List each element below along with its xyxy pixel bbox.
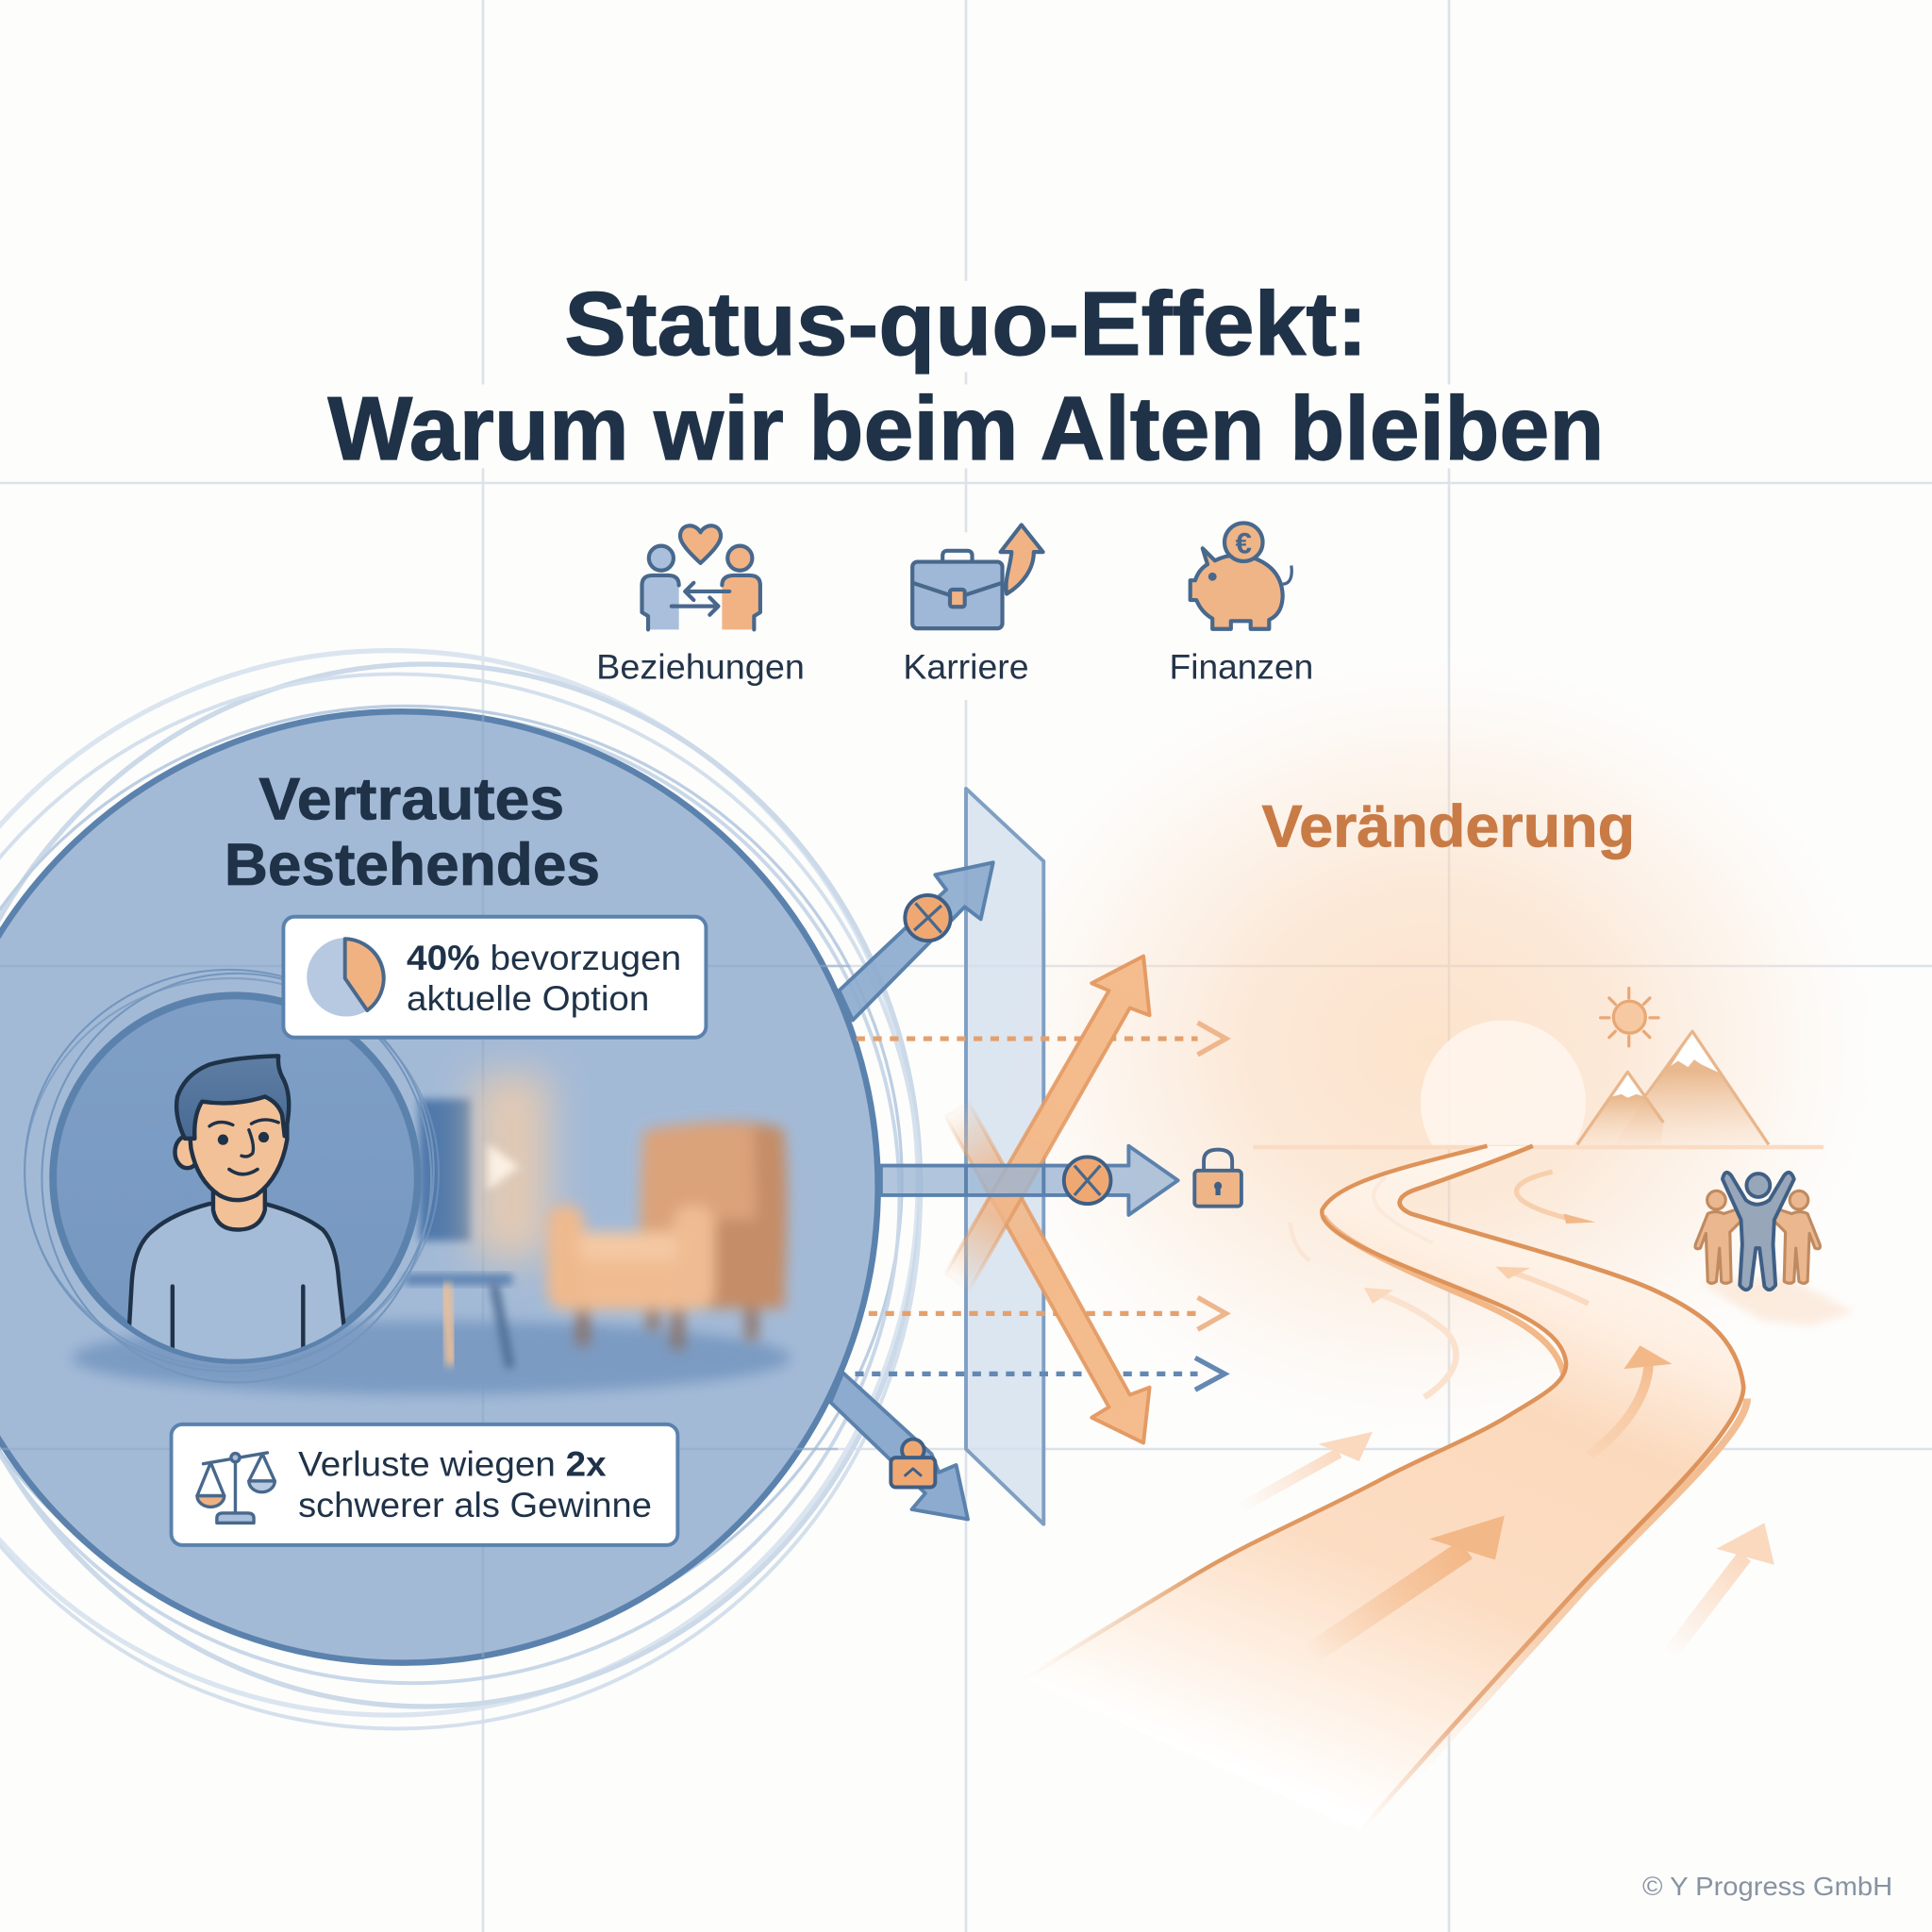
arrow: left of road: [1237, 1432, 1373, 1513]
heading: Vertrautes Bestehendes: [225, 767, 600, 898]
person: left: [1695, 1191, 1742, 1283]
icon: blocked person badge: [891, 1440, 935, 1487]
icon: group of people: [1695, 1173, 1855, 1325]
arrow: road big: [1303, 1516, 1505, 1665]
change glow background: [961, 641, 1897, 1454]
title: [327, 275, 1605, 479]
callout: 40 percent: aktuelle Option: [407, 978, 649, 1018]
road edge shadow: right: [1380, 1398, 1747, 1816]
callout text: Verluste wiegen 2x: [298, 1444, 607, 1484]
person circle: [25, 970, 439, 1382]
icon: relationships: [641, 525, 760, 629]
blocked arrow: upper: [839, 862, 993, 1020]
pie chart: [307, 938, 386, 1017]
road edge: right: [1360, 1146, 1743, 1831]
orange arrow: upward: [945, 957, 1150, 1291]
icon: lock: [1194, 1150, 1241, 1207]
soft motion arrows: [1237, 1172, 1774, 1665]
person: centre: [1723, 1173, 1794, 1290]
heading: Veränderung: Veränderung: [1261, 793, 1635, 859]
horizon line: [1253, 1145, 1824, 1149]
arrow: right of road: [1662, 1523, 1774, 1661]
blurred living room: [72, 1074, 791, 1395]
callout: losses weigh double: [172, 1424, 677, 1545]
barrier panel: [966, 789, 1043, 1524]
road edge: left: [1025, 1146, 1566, 1679]
road edge shadow: left: [1324, 1216, 1563, 1374]
label: Beziehungen: Beziehungen: [596, 647, 805, 687]
person illustration: [127, 1056, 349, 1368]
icon: balance scale: [197, 1453, 275, 1523]
callout text: 40% bevorzugen: [407, 938, 681, 977]
horizon landscape: [1253, 989, 1824, 1147]
winding road: [1025, 1146, 1747, 1831]
pale sun disc: [1421, 1020, 1586, 1147]
arrow: road curved: [1590, 1345, 1672, 1456]
callout: 40 percent: [283, 917, 706, 1038]
title: Warum wir beim Alten bleiben: [327, 379, 1605, 479]
icon: mountains: [1577, 1031, 1769, 1144]
person: right: [1774, 1191, 1820, 1283]
label: Karriere: Karriere: [903, 647, 1029, 687]
callout: losses weigh double: schwerer als Gewinne: [298, 1485, 652, 1524]
icon: career briefcase: [912, 525, 1043, 628]
heading: Vertrautes Bestehendes: Vertrautes: [258, 767, 564, 833]
blocked arrow: lower: [830, 1373, 968, 1519]
heading: Vertrautes Bestehendes: Bestehendes: [225, 832, 600, 898]
dashed path: blue: [855, 1357, 1224, 1390]
label: Finanzen: Finanzen: [1170, 647, 1313, 687]
arrow: left curved: [1364, 1288, 1457, 1397]
group shadow: [1700, 1276, 1855, 1325]
orange arrow: downward: [945, 1102, 1150, 1442]
copyright footer: © Y Progress GmbH: [1642, 1872, 1892, 1901]
icon: blocked badge: [905, 895, 951, 941]
icon row: life domains: [596, 523, 1313, 687]
title: Status-quo-Effekt:: [564, 275, 1368, 375]
dashed path: lower orange: [869, 1297, 1226, 1329]
icon: sun: [1601, 989, 1658, 1046]
panel: familiar existing circle: [0, 711, 878, 1663]
road lane mark: [1374, 1176, 1433, 1243]
icon: piggy bank: €: [1236, 526, 1252, 559]
dashed path: upper orange: [857, 1023, 1226, 1055]
arrow: near horizon: [1517, 1172, 1595, 1224]
arrow: middle of road: [1496, 1267, 1589, 1304]
blocked arrow: middle: [881, 1146, 1178, 1215]
comfort zone rings: [0, 651, 921, 1728]
icon: blocked badge: [1064, 1157, 1110, 1204]
icon: piggy bank: [1191, 523, 1291, 629]
